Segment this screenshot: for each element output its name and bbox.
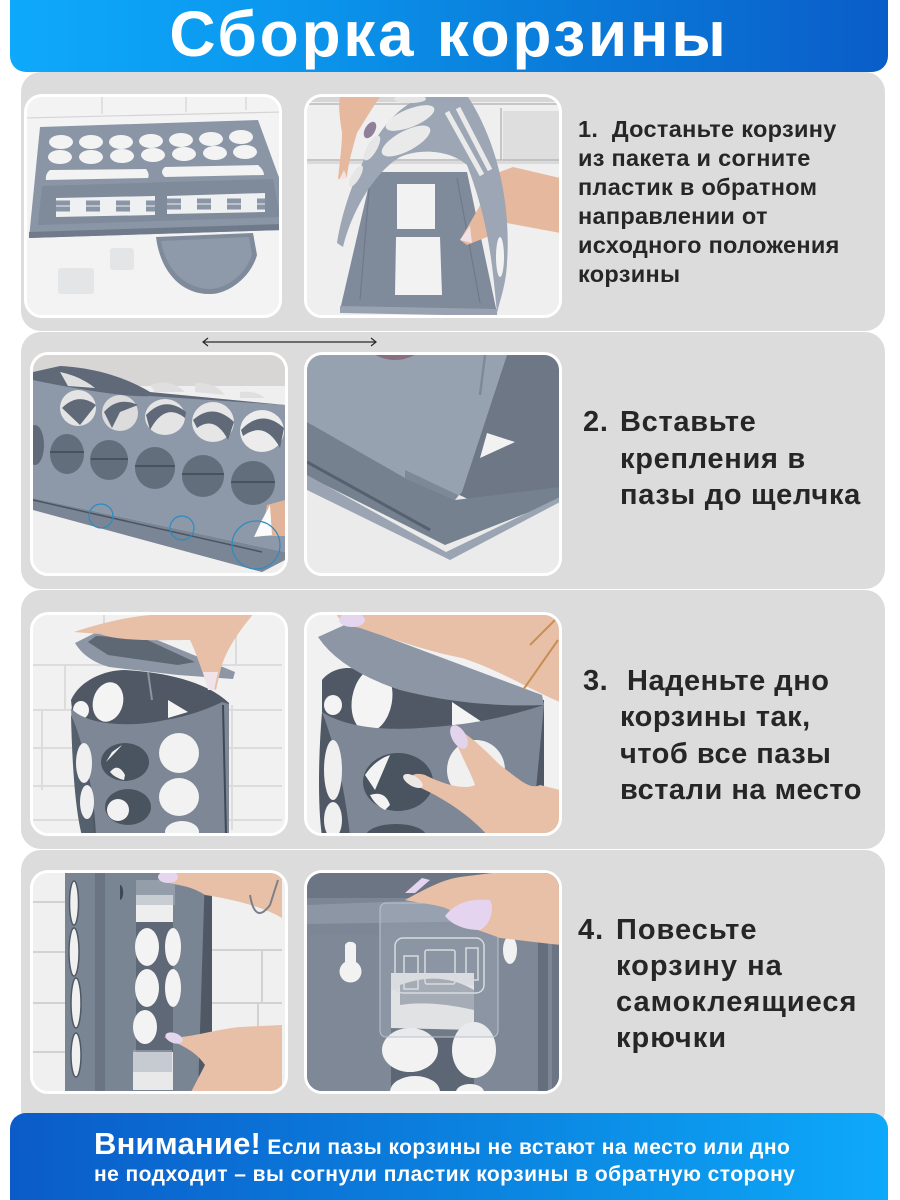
text: step 2 instructions: 2. xyxy=(583,406,609,438)
text: step 1 instructions: пластик в обратном xyxy=(578,174,817,200)
text: step 1 instructions: исходного положения xyxy=(578,232,840,258)
photo: fitting the base lid xyxy=(30,612,288,836)
photo: clips with blue circle markers xyxy=(30,352,288,576)
text: step 3 instructions xyxy=(583,665,862,806)
photo: basket back with hook plates xyxy=(30,870,288,1094)
text: step 3 instructions: корзины так, xyxy=(620,701,811,733)
text: step 1 instructions: корзины xyxy=(578,261,680,287)
photo: bending the basket plastic xyxy=(304,94,562,318)
footer banner: warning note: Внимание! Если пазы корзины не встают на место или дно xyxy=(94,1126,790,1161)
photo: close-up of self-adhesive hook xyxy=(304,870,562,1094)
text: step 3 instructions: 3. xyxy=(583,665,608,697)
photo: pressing the base onto the slots xyxy=(304,612,562,836)
footer banner: warning note: не подходит – вы согнули пластик корзины в обратную сторону xyxy=(94,1163,795,1186)
text: step 1 instructions: из пакета и согните xyxy=(578,145,811,171)
text: step 4 instructions xyxy=(578,914,857,1054)
text: step 1 instructions: направлении от xyxy=(578,203,768,229)
text: step 3 instructions: чтоб все пазы xyxy=(620,738,831,770)
text: step 4 instructions: 4. xyxy=(578,914,604,946)
photo: parts laid out flat xyxy=(24,94,282,318)
text: step 2 instructions: пазы до щелчка xyxy=(620,479,861,511)
text: step 2 instructions xyxy=(583,406,861,511)
panel: step 4 background xyxy=(21,850,885,1130)
panel: step 1 background xyxy=(21,72,885,331)
text: step 3 instructions: встали на место xyxy=(620,774,862,806)
text: step 2 instructions: крепления в xyxy=(620,443,806,475)
panel: step 2 background xyxy=(21,332,885,589)
title banner: Сборка корзины xyxy=(169,0,729,70)
text: step 2 instructions: Вставьте xyxy=(620,406,756,438)
text: step 4 instructions: корзину на xyxy=(616,950,783,982)
title banner xyxy=(10,0,888,72)
text: step 4 instructions: Повесьте xyxy=(616,914,758,946)
panel: step 3 background xyxy=(21,590,885,849)
text: step 3 instructions: Наденьте дно xyxy=(627,665,829,697)
footer banner: warning note xyxy=(10,1113,888,1200)
photo: close-up of clip insertion xyxy=(304,352,562,576)
text: step 4 instructions: самоклеящиеся xyxy=(616,986,857,1018)
text: step 4 instructions: крючки xyxy=(616,1022,727,1054)
text: step 1 instructions: 1. Достаньте корзину xyxy=(578,116,837,142)
arrow: double-headed width marker xyxy=(202,338,377,346)
text: step 1 instructions xyxy=(578,116,840,287)
